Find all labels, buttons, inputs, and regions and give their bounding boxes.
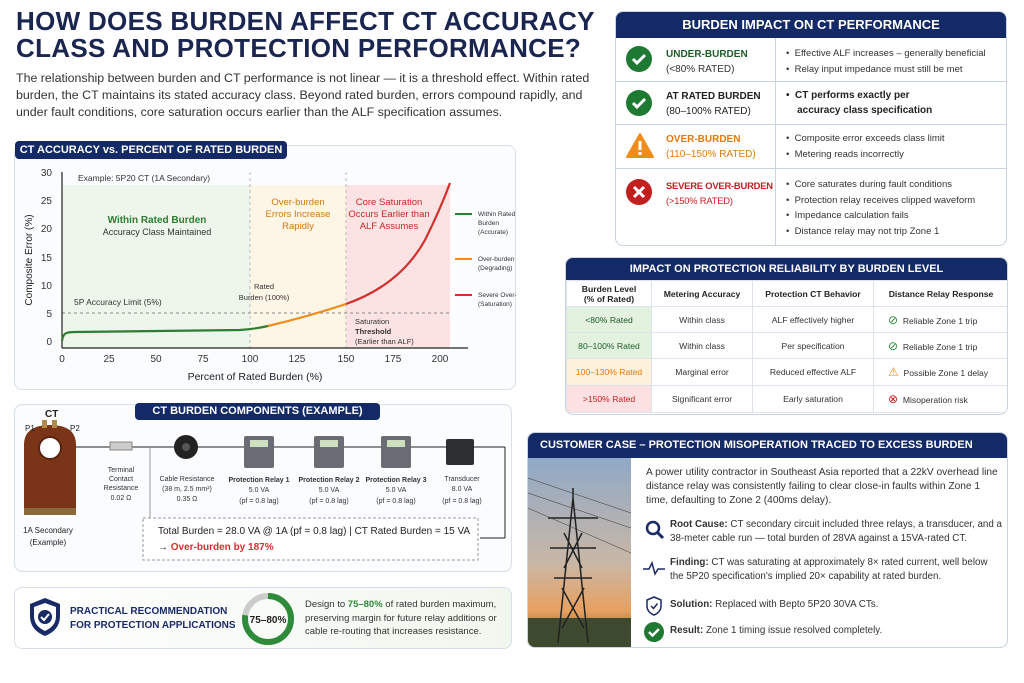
panel: burden components: Protection Relay 1 [228, 477, 290, 484]
row: under-burden: • Effective ALF increases – generally beneficial [786, 48, 986, 59]
panel: chart: Composite Error (%) [24, 214, 35, 306]
panel: practical recommendation: Design to 75–80% of rated burden maximum, preserving margin for future relay additions or cable re-routing that increases resistance. [305, 599, 497, 637]
panel: burden components: Total Burden = 28.0 VA @ 1A (pf = 0.8 lag) | CT Rated Burden = 15 VA [158, 526, 470, 537]
row: under-burden: • Relay input impedance must still be met [786, 64, 963, 75]
panel: burden components: (Example) [30, 538, 67, 547]
panel: protection reliability table: Significant error [672, 394, 732, 404]
panel: protection reliability table: 80–100% Rated [578, 340, 640, 350]
panel: customer case: A power utility contractor in Southeast Asia reported that a 22kV overhead line distance relay was consistently failing to clear close-in faults within Zone 1 time, defaulting to Zone 2 (400ms delay). [646, 467, 998, 506]
panel: chart: 150 [338, 354, 355, 365]
item: root cause: Root Cause: CT secondary circuit included three relays, a transducer, and a 38-meter cable run — total burden of 28VA against a 15VA-rated CT. [670, 519, 1002, 544]
panel: burden components: Protection Relay 3 [365, 477, 427, 484]
row: at rated: AT RATED BURDEN [666, 91, 761, 102]
panel: protection reliability table: ⚠ Possible Zone 1 delay [888, 365, 988, 379]
components header tab [135, 403, 380, 420]
item: solution [646, 596, 878, 616]
panel: burden components: Resistance [104, 485, 138, 492]
panel: burden components: (pf = 0.8 lag) [376, 498, 416, 505]
panel: chart: 100 [242, 354, 259, 365]
row: severe [626, 179, 975, 236]
panel: chart: 0 [59, 354, 65, 365]
panel: protection reliability table: Early saturation [783, 394, 843, 404]
item: finding: Finding: CT was saturating at approximately 8× rated current, well below the 5P20 specification's implied 20× capability at rated burden. [670, 557, 988, 582]
panel: chart: 125 [289, 354, 306, 365]
panel: burden components: 5.0 VA [386, 487, 407, 494]
row: at rated: accuracy class specification [797, 105, 932, 116]
panel: chart: (Accurate) [478, 229, 508, 236]
panel: chart: ALF Assumes [360, 221, 419, 232]
panel: practical recommendation: PRACTICAL RECOMMENDATION [70, 606, 227, 617]
panel: chart: 25 [41, 196, 52, 207]
panel: protection reliability table: IMPACT ON PROTECTION RELIABILITY BY BURDEN LEVEL [630, 263, 943, 275]
panel: burden components: P2 [70, 424, 80, 433]
row: at rated: • CT performs exactly per [786, 90, 910, 101]
panel: chart: Occurs Earlier than [348, 209, 430, 220]
item: solution: Solution: Replaced with Bepto 5P20 30VA CTs. [670, 599, 878, 610]
panel: protection reliability table: ⊗ Misoperation risk [888, 392, 968, 406]
panel: chart: Errors Increase [266, 209, 330, 220]
panel: protection reliability table: Within class [679, 314, 725, 324]
panel: burden impact on CT performance: BURDEN IMPACT ON CT PERFORMANCE [682, 17, 940, 32]
panel: protection reliability table: Metering Accuracy [664, 288, 740, 298]
row: severe: • Distance relay may not trip Zone 1 [786, 226, 939, 236]
panel: chart: (Saturation) [478, 301, 512, 308]
panel: burden components: (pf = 0.8 lag) [442, 498, 482, 505]
row: over-burden: • Composite error exceeds class limit [786, 133, 945, 144]
panel: chart: Rapidly [282, 221, 314, 232]
panel: protection reliability table: (% of Rated) [584, 294, 634, 304]
item: result [644, 622, 882, 642]
title: HOW DOES BURDEN AFFECT CT ACCURACY CLASS AND PROTECTION PERFORMANCE? [16, 6, 594, 63]
panel: chart: (Degrading) [478, 265, 512, 272]
panel: chart: Within Rated [478, 211, 516, 218]
panel: chart: Over-burden [478, 256, 515, 263]
icon: CT [24, 420, 76, 515]
panel: burden components: → Over-burden by 187% [158, 542, 274, 553]
panel: protection reliability table: Distance Relay Response [889, 288, 993, 298]
panel: chart: Percent of Rated Burden (%) [188, 371, 322, 383]
row: at rated: (80–100% RATED) [666, 106, 751, 117]
panel: chart: Burden [478, 220, 499, 227]
panel: burden components: Cable Resistance [160, 476, 215, 483]
panel: chart: Over-burden [271, 197, 325, 208]
panel: burden components: Protection Relay 2 [298, 477, 360, 484]
image: transmission tower [528, 458, 631, 647]
panel: protection reliability table: >150% Rated [583, 394, 635, 404]
panel: chart: 25 [103, 354, 115, 365]
components header tab: CT BURDEN COMPONENTS (EXAMPLE) [152, 405, 363, 417]
panel: burden components: Terminal [108, 467, 135, 474]
panel: protection reliability table: Per specification [781, 340, 845, 350]
panel: chart: 0 [46, 337, 52, 348]
panel: chart: 15 [41, 253, 52, 264]
row: severe: SEVERE OVER-BURDEN [666, 180, 773, 191]
panel: chart: Example: 5P20 CT (1A Secondary) [78, 173, 210, 183]
panel: chart: 200 [432, 354, 449, 365]
panel: protection reliability table: Burden Level [582, 284, 636, 294]
icon: shield [30, 598, 60, 636]
panel: chart: Rated [254, 282, 274, 291]
panel: chart: Core Saturation [356, 197, 422, 208]
panel: burden components: (pf = 0.8 lag) [309, 498, 349, 505]
panel: customer case [527, 432, 1008, 648]
panel: chart: 5P Accuracy Limit (5%) [74, 297, 162, 307]
row: over-burden: • Metering reads incorrectly [786, 149, 904, 160]
panel: protection reliability table: 100–130% Rated [576, 367, 642, 377]
donut 75-80% [242, 593, 294, 645]
panel: burden impact on CT performance [615, 11, 1007, 246]
panel: burden components: 0.35 Ω [177, 496, 197, 503]
panel: chart: Within Rated Burden [108, 215, 206, 226]
panel: protection reliability table: ⊘ Reliable Zone 1 trip [888, 312, 977, 326]
panel: protection reliability table: ALF effectively higher [772, 314, 854, 324]
panel: practical recommendation: FOR PROTECTION APPLICATIONS [70, 620, 236, 631]
row: under-burden: (<80% RATED) [666, 64, 734, 75]
panel: protection reliability table [565, 257, 1008, 415]
panel: burden components: 5.0 VA [249, 487, 270, 494]
row: severe: • Impedance calculation fails [786, 210, 909, 221]
row: over-burden: OVER-BURDEN [666, 134, 740, 145]
row: severe: (>150% RATED) [666, 195, 733, 206]
panel: chart: 20 [41, 224, 52, 235]
panel: chart: Burden (100%) [239, 293, 290, 302]
panel: chart: (Earlier than ALF) [355, 337, 414, 346]
row: at rated [616, 82, 1008, 125]
panel: chart: 50 [150, 354, 162, 365]
panel: chart: Accuracy Class Maintained [103, 227, 211, 237]
panel: chart: 30 [41, 168, 52, 179]
panel: chart: Threshold [355, 327, 392, 336]
chart header tab [15, 141, 287, 159]
panel: burden components: 0.02 Ω [111, 495, 131, 502]
panel: burden components: (pf = 0.8 lag) [239, 498, 279, 505]
panel: protection reliability table: Reduced effective ALF [770, 367, 856, 377]
panel: protection reliability table: Marginal error [675, 367, 729, 377]
row: over-burden: (110–150% RATED) [666, 149, 756, 160]
panel: chart: 175 [385, 354, 402, 365]
chart header tab: CT ACCURACY vs. PERCENT OF RATED BURDEN [20, 144, 282, 156]
panel: customer case: CUSTOMER CASE – PROTECTION MISOPERATION TRACED TO EXCESS BURDEN [540, 439, 973, 451]
row: under-burden [616, 38, 1008, 82]
row: severe: • Protection relay receives clipped waveform [786, 194, 975, 206]
panel: burden components: Contact [109, 476, 133, 483]
panel: burden components [14, 404, 512, 572]
panel: chart: 5 [46, 309, 52, 320]
panel: chart: Saturation [355, 317, 389, 326]
panel: protection reliability table: Protection CT Behavior [765, 288, 861, 298]
panel: burden components: P1 [25, 424, 35, 433]
intro text: The relationship between burden and CT performance is not linear — it is a threshold effect. Within rated burden, the CT maintains its stated accuracy class. Beyond rated burden, errors compound rapidly, and under fault conditions, core saturation occurs earlier than the ALF specification assumes. [16, 71, 589, 119]
item: result: Result: Zone 1 timing issue resolved completely. [670, 625, 882, 636]
row: under-burden: UNDER-BURDEN [666, 49, 748, 60]
panel: burden components: (38 m, 2.5 mm²) [162, 486, 212, 493]
panel: burden components: 8.0 VA [452, 486, 473, 493]
row: over-burden [616, 125, 1008, 169]
row: severe: • Core saturates during fault conditions [786, 179, 952, 190]
panel: chart: 10 [41, 281, 52, 292]
panel: chart: 75 [197, 354, 209, 365]
panel: burden components: 5.0 VA [319, 487, 340, 494]
panel: burden components: CT [45, 409, 58, 420]
panel: protection reliability table: Within class [679, 340, 725, 350]
panel: burden components: Transducer [444, 476, 480, 483]
panel: protection reliability table: ⊘ Reliable Zone 1 trip [888, 338, 977, 352]
donut 75-80%: 75–80% [250, 615, 286, 626]
panel: chart [14, 145, 516, 390]
panel: practical recommendation [14, 587, 512, 649]
panel: protection reliability table: <80% Rated [585, 314, 633, 324]
panel: burden components: 1A Secondary [23, 526, 73, 535]
